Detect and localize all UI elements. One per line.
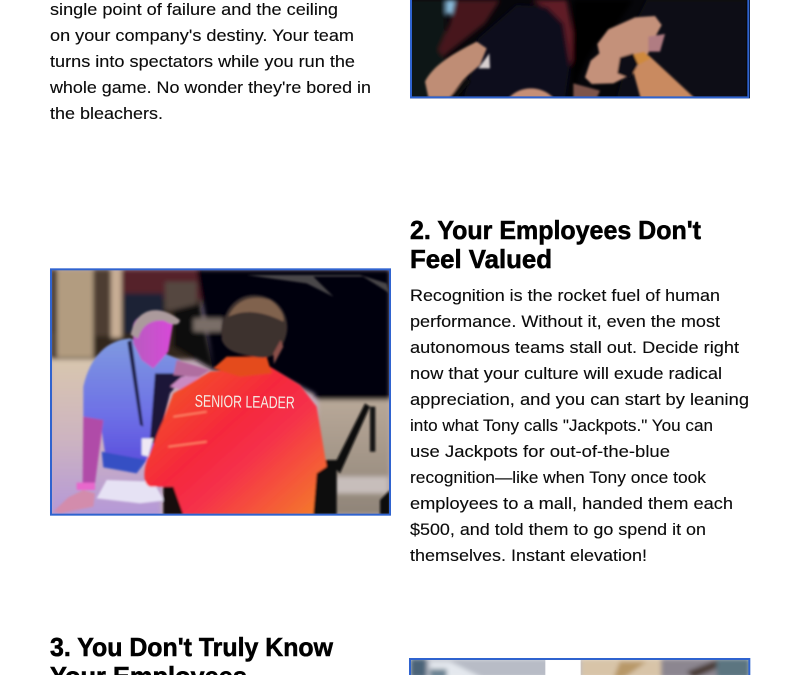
text block: section 1 closing paragraph: whole game. No wonder they're bored in <box>49 79 371 97</box>
text block: section 1 closing paragraph: single point of failure and the ceiling <box>50 1 338 19</box>
photo: senior leader in orange shirt talking with a man in blue: SENIOR LEADER <box>195 392 295 412</box>
text block: section 2 body paragraph: themselves. Instant elevation! <box>410 547 647 565</box>
text block: section 1 closing paragraph: turns into spectators while you run the <box>50 53 355 71</box>
text block: section 1 closing paragraph: the bleachers. <box>50 105 163 123</box>
text block: section 2 body paragraph <box>410 287 749 565</box>
text block: section 2 body paragraph: now that your culture will exude radical <box>410 365 722 383</box>
heading: 2. Your Employees Don't Feel Valued <box>410 215 701 274</box>
heading: 3. You Don't Truly Know Your Employees <box>50 632 334 675</box>
text block: section 2 body paragraph: use Jackpots for out-of-the-blue <box>410 443 670 461</box>
text block: section 2 body paragraph: autonomous teams stall out. Decide right <box>410 339 739 357</box>
photo: senior leader in orange shirt talking with a man in blue <box>51 269 390 516</box>
text block: section 2 body paragraph: into what Tony calls "Jackpots." You can <box>410 417 713 435</box>
text block: section 2 body paragraph: performance. Without it, even the most <box>410 313 720 331</box>
text block: section 1 closing paragraph: on your company's destiny. Your team <box>50 27 354 45</box>
heading: 3. You Don't Truly Know Your Employees: 3. You Don't Truly Know <box>50 632 334 662</box>
heading: 2. Your Employees Don't Feel Valued: Feel Valued <box>410 244 552 274</box>
text block: section 1 closing paragraph <box>49 1 371 123</box>
text block: section 2 body paragraph: $500, and told them to go spend it on <box>410 521 706 539</box>
photo: top edge of third section image <box>410 658 750 675</box>
text block: section 2 body paragraph: recognition—like when Tony once took <box>410 469 707 487</box>
heading: 2. Your Employees Don't Feel Valued: 2. Your Employees Don't <box>410 215 701 245</box>
photo: two team members with hands on chests <box>410 0 750 98</box>
text block: section 2 body paragraph: employees to a mall, handed them each <box>410 495 733 513</box>
text block: section 2 body paragraph: Recognition is the rocket fuel of human <box>410 287 720 305</box>
text block: section 2 body paragraph: appreciation, and you can start by leaning <box>410 391 749 409</box>
